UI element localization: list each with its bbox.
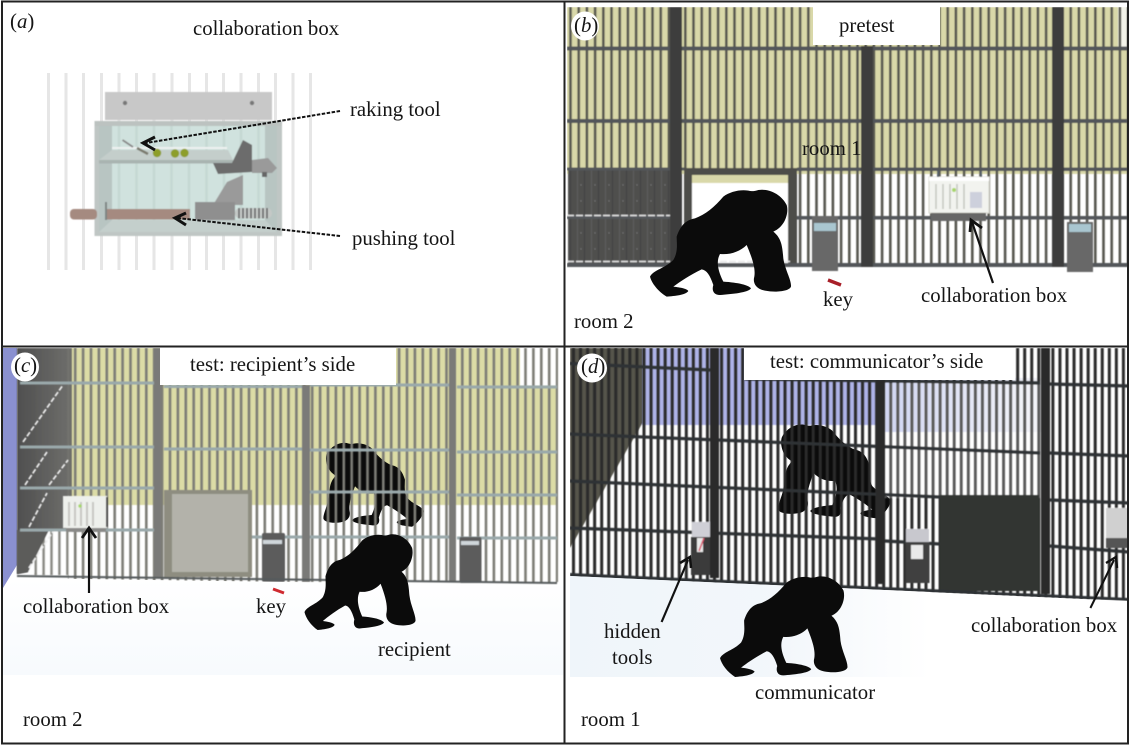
panel d: test communicator side bbox=[570, 347, 1129, 731]
label: collaboration box: collaboration box bbox=[23, 595, 170, 618]
label: room 2: room 2 bbox=[23, 708, 82, 731]
cage bars and posts bbox=[17, 348, 558, 584]
label: communicator: communicator bbox=[755, 681, 875, 704]
cage bars, rails and posts bbox=[570, 348, 1129, 601]
panel a letter: (a) bbox=[10, 10, 34, 33]
panel d letter: (d) bbox=[581, 355, 605, 378]
floor tint bbox=[67, 578, 321, 583]
key bbox=[273, 589, 284, 593]
label: pushing tool: pushing tool bbox=[352, 227, 456, 250]
panel d heading: test: communicator’s side bbox=[770, 350, 983, 373]
floor tint bbox=[570, 576, 930, 677]
arrow: collaboration box bbox=[970, 220, 993, 283]
label: collaboration box: collaboration box bbox=[971, 614, 1118, 637]
apparatus illustration bbox=[70, 92, 282, 236]
arrow: collaboration box bbox=[1090, 557, 1117, 608]
panel b heading: pretest bbox=[839, 14, 895, 37]
blue side wall bbox=[3, 348, 17, 588]
panel c heading: test: recipient’s side bbox=[190, 353, 355, 376]
back wall bbox=[17, 348, 557, 574]
background cage stripes bbox=[47, 73, 312, 270]
arrow: raking tool bbox=[143, 111, 340, 150]
ape silhouette bbox=[650, 190, 791, 297]
title background bbox=[160, 347, 396, 385]
foreground ape silhouette bbox=[720, 576, 847, 677]
label: room 1: room 1 bbox=[581, 708, 640, 731]
collaboration box miniature bbox=[1106, 508, 1128, 548]
collaboration box miniature bbox=[929, 171, 989, 221]
panel c letter: (c) bbox=[14, 354, 37, 377]
panel d letter bbox=[577, 354, 607, 382]
arrow: hidden tools bbox=[662, 557, 691, 622]
door bbox=[164, 490, 252, 577]
label: hidden tools: tools bbox=[612, 646, 652, 669]
panel b: pretest scene bbox=[567, 7, 1128, 333]
panel a: collaboration box bbox=[10, 10, 456, 270]
label: raking tool: raking tool bbox=[350, 98, 441, 121]
bins bbox=[691, 522, 930, 583]
back wall and cage bbox=[567, 7, 1128, 272]
title background bbox=[813, 7, 940, 45]
label: recipient: recipient bbox=[378, 638, 451, 661]
panel a heading: collaboration box bbox=[193, 17, 340, 40]
background ape behind bars bbox=[323, 443, 424, 527]
floor bbox=[570, 576, 1129, 677]
label: key: key bbox=[256, 595, 287, 618]
floor edge bbox=[17, 575, 557, 584]
label: key: key bbox=[823, 288, 854, 311]
label: room 2: room 2 bbox=[574, 310, 634, 333]
panel c: test recipient side bbox=[3, 347, 563, 731]
title background bbox=[744, 347, 1015, 380]
panel c letter bbox=[11, 352, 39, 382]
label: collaboration box: collaboration box bbox=[921, 284, 1068, 307]
panel b letter bbox=[571, 12, 599, 40]
foreground ape silhouette bbox=[304, 534, 416, 630]
panel b letter: (b) bbox=[574, 14, 598, 37]
collaboration box miniature bbox=[63, 496, 108, 532]
key bbox=[828, 280, 841, 285]
label: hidden tools: hidden bbox=[604, 620, 661, 643]
bins bbox=[812, 216, 1093, 272]
background ape behind bars bbox=[778, 425, 891, 518]
label: room 1: room 1 bbox=[802, 137, 862, 160]
arrow: pushing tool bbox=[175, 213, 340, 236]
door bbox=[940, 495, 1039, 591]
arrow: collaboration box bbox=[82, 528, 96, 593]
back wall bbox=[570, 348, 1047, 548]
bins bbox=[262, 533, 482, 583]
